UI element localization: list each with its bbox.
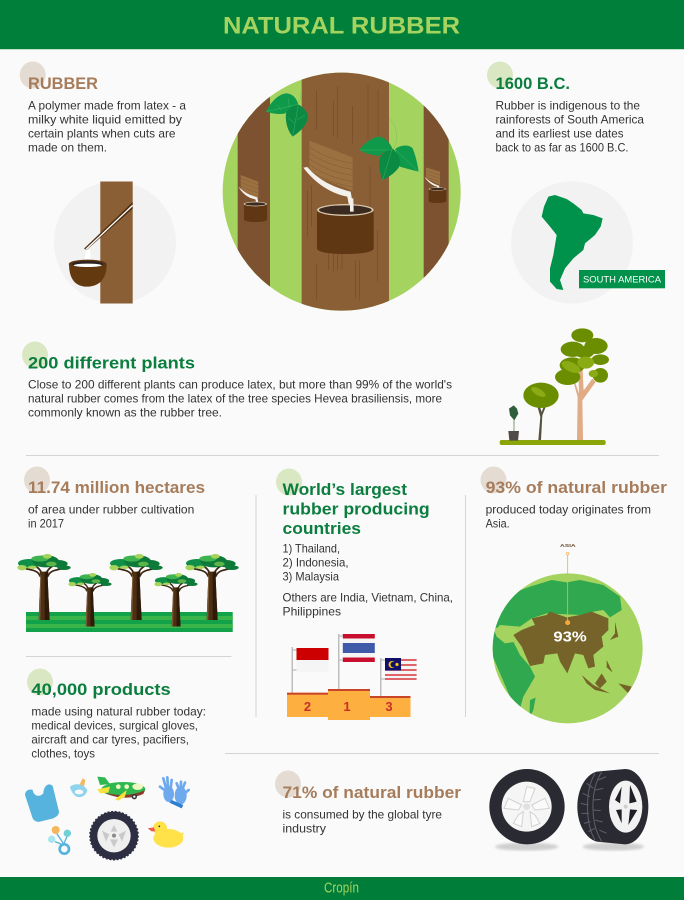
panel: 1600 B.C. [487,62,644,154]
icon: latex tapping on trunk [54,182,176,304]
panel: 40,000 products: made using natural rubber today: [31,704,206,718]
chart: flags on podium: 1 [343,699,351,714]
icon: gloves [160,777,189,808]
panel: rubber definition: made on them. [28,140,107,154]
chart: flags on podium [287,634,417,720]
panel: 200 different plants: Close to 200 different plants can produce latex, but more than 99% of the world's [28,378,452,392]
icon: rattle [48,826,71,854]
panel: rubber definition: milky white liquid emitted by [28,112,182,126]
icon: front tyre [489,769,565,851]
panel: 1600 B.C.: Rubber is indigenous to the [496,98,640,112]
footer band with logo [0,877,684,900]
panel: 40,000 products: clothes, toys [31,746,95,760]
chart: flags on podium: 2 [304,699,311,714]
illustration: rubber plantation [17,554,239,632]
panel: 93% of natural rubber: 93% of natural rubber [486,478,667,497]
header band with title: NATURAL RUBBER [223,12,460,40]
panel: 71% of natural rubber: industry [282,822,326,836]
panel: 93% of natural rubber: produced today originates from [486,502,651,516]
panel: largest producing countries: countries [282,519,361,538]
map: South America [511,182,665,304]
icon: angled tyre [577,769,648,851]
panel: 40,000 products: 40,000 products [31,680,171,699]
panel: 93% of natural rubber: Asia. [486,516,510,530]
panel: 1600 B.C.: back to as far as 1600 B.C. [496,140,628,154]
divider [26,455,659,456]
divider [225,753,659,754]
footer band with logo: Cropín [324,880,359,897]
icon: toy plane [97,777,145,801]
icon: rubber duck [148,821,184,848]
panel: 40,000 products: medical devices, surgical gloves, [31,718,198,732]
panel: 200 different plants: 200 different plants [28,354,195,373]
icon: bib [25,784,59,822]
panel: 40,000 products [27,668,206,760]
panel: largest producing countries [276,468,453,618]
panel: 11.74 million hectares: of area under rubber cultivation [28,502,194,516]
panel: largest producing countries: Others are India, Vietnam, China, [282,590,453,604]
panel: largest producing countries: World’s largest [282,480,407,499]
panel: 71% of natural rubber: is consumed by the global tyre [282,808,442,822]
icon: growing trees [500,328,609,445]
map: globe highlighting Asia: ASIA [560,543,576,549]
panel: largest producing countries: rubber producing [282,500,430,518]
panel: 93% of natural rubber [480,466,667,530]
panel: 200 different plants: commonly known as the rubber tree. [28,406,222,420]
map: South America: SOUTH AMERICA [583,275,662,286]
chart: flags on podium: 3 [385,699,393,714]
panel: 1600 B.C.: rainforests of South America [496,112,644,126]
main illustration: tapped rubber trees [223,70,461,313]
panel: 71% of natural rubber: 71% of natural rubber [282,783,461,802]
panel: 71% of natural rubber [275,770,461,836]
map: globe highlighting Asia [490,543,643,727]
panel: largest producing countries: 2) Indonesia, [282,556,348,570]
panel: rubber definition [20,62,186,154]
icon: pacifier [70,778,87,797]
panel: largest producing countries: 1) Thailand, [282,542,340,556]
panel: 11.74 million hectares: in 2017 [28,516,64,530]
panel: 1600 B.C.: and its earliest use dates [496,126,624,140]
panel: 200 different plants: natural rubber comes from the latex of the tree species Hevea brasiliensis, more [28,392,442,406]
panel: 11.74 million hectares [24,466,205,530]
column dividers [256,495,466,717]
panel: 11.74 million hectares: 11.74 million hectares [28,478,205,497]
panel: 40,000 products: aircraft and car tyres, pacifiers, [31,732,189,746]
panel: largest producing countries: Philippines [282,604,341,618]
panel: 1600 B.C.: 1600 B.C. [496,74,570,93]
panel: rubber definition: certain plants when cuts are [28,126,176,140]
map: globe highlighting Asia: 93% [553,629,587,645]
icons: rubber products [25,777,189,860]
icon: wheel [90,812,138,860]
panel: largest producing countries: 3) Malaysia [282,570,339,584]
panel: 200 different plants [22,342,452,420]
panel: rubber definition: A polymer made from latex - a [28,98,186,112]
divider [26,656,231,657]
panel: rubber definition: RUBBER [28,74,98,93]
header band with title [0,0,684,50]
